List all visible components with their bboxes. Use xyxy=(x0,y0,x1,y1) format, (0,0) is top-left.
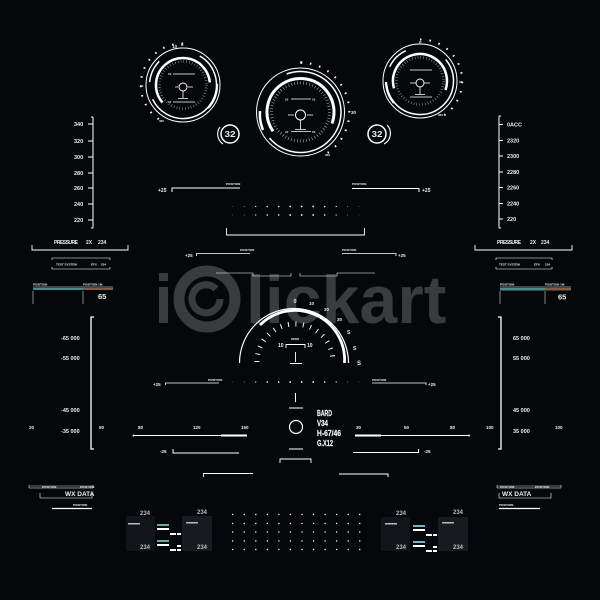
left slider: 120 xyxy=(193,425,201,430)
top position line left xyxy=(158,182,240,194)
left vertical scale: 240 xyxy=(74,202,83,208)
right altitude bracket: 100 xyxy=(555,425,563,430)
teal status bar right: 65 xyxy=(558,292,566,302)
left altitude bracket: -65 000 xyxy=(61,336,80,342)
right altitude bracket xyxy=(486,317,563,449)
WX data right: POSITION xyxy=(535,485,549,489)
left vertical scale xyxy=(74,117,93,228)
data panels left: 234 xyxy=(140,511,151,517)
top position line left: POSITION xyxy=(226,182,240,186)
pressure label right: 234 xyxy=(541,240,550,246)
third position line left: +25 xyxy=(153,382,161,387)
pressure label left: 2X xyxy=(86,240,93,246)
data panels right: 234 xyxy=(453,545,464,551)
small dial: right 32 xyxy=(368,125,390,144)
third position line right: +25 xyxy=(428,382,436,387)
right altitude bracket: 35 000 xyxy=(513,429,530,435)
small dial: right 32: 32 xyxy=(372,130,383,139)
third position line left: POSITION xyxy=(208,378,222,382)
left slider: 80 xyxy=(138,425,144,430)
left vertical scale: 220 xyxy=(74,218,83,224)
wide bracket xyxy=(226,228,364,235)
test system left: EFX xyxy=(91,262,97,266)
gauge: top centre: 10 xyxy=(285,130,289,134)
pressure label left: 234 xyxy=(98,240,107,246)
test system left xyxy=(52,258,110,269)
minus 25 right xyxy=(353,449,431,454)
right vertical scale: 0ACC xyxy=(507,122,522,128)
gauge: top left: 10 xyxy=(172,44,178,49)
WX data right: POSITION xyxy=(500,485,514,489)
WX data left: WX DATA xyxy=(65,491,95,498)
data panels left xyxy=(126,510,212,551)
right slider: 80 xyxy=(450,425,456,430)
teal status bar left: POSITION 1M xyxy=(83,282,103,286)
dot grid top xyxy=(232,206,359,216)
gauge: top right: 30 xyxy=(459,80,463,84)
second position line right: +25 xyxy=(398,253,406,258)
teal status bar right: POSITION 1M xyxy=(545,282,565,286)
third position line right: POSITION xyxy=(372,378,386,382)
right altitude bracket: 55 000 xyxy=(513,356,530,362)
pressure label right: 2X xyxy=(530,240,537,246)
left altitude bracket: 50 xyxy=(99,425,105,430)
WX data right: POSITION xyxy=(499,503,513,507)
gauge: top centre xyxy=(249,60,357,164)
left altitude bracket: -55 000 xyxy=(61,356,80,362)
gauge: top centre: 10 xyxy=(312,98,316,102)
readout text: G.X12 xyxy=(317,438,333,448)
right vertical scale: 2260 xyxy=(507,186,519,192)
right altitude bracket: 100 xyxy=(486,425,494,430)
second position line left: POSITION xyxy=(240,248,254,252)
teal status bar right: POSITION xyxy=(500,282,514,286)
right slider: 30 xyxy=(356,425,362,430)
left vertical scale: 340 xyxy=(74,122,83,128)
gauge: top centre: 0 xyxy=(300,60,303,65)
right altitude bracket: 65 000 xyxy=(513,336,530,342)
WX data left: POSITION xyxy=(42,485,56,489)
teal status bar left: POSITION xyxy=(33,282,47,286)
left vertical scale: 260 xyxy=(74,186,83,192)
right slider: 50 xyxy=(404,425,410,430)
arch gauge: S xyxy=(347,330,351,336)
pressure label right: PRESSURE xyxy=(497,240,522,246)
data panels left: 234 xyxy=(197,510,208,516)
gauge: top right: 0 xyxy=(419,40,422,45)
gauge: top centre: 30 xyxy=(351,110,357,115)
arch gauge: S xyxy=(353,346,357,352)
WX data right xyxy=(497,485,561,508)
gauge: top left: 10 xyxy=(168,100,172,104)
right vertical scale xyxy=(499,116,522,228)
second position line left xyxy=(185,248,254,258)
readout text: BARD xyxy=(317,408,332,418)
left vertical scale: 300 xyxy=(74,155,83,161)
readout text: H-67/46 xyxy=(317,428,341,438)
left altitude bracket: -45 000 xyxy=(61,408,80,414)
arch gauge: 10 xyxy=(307,343,313,349)
right slider xyxy=(355,425,470,436)
gauge: top centre: 10 xyxy=(285,98,289,102)
WX data left: POSITION xyxy=(80,485,94,489)
data panels right: 234 xyxy=(453,510,464,516)
arch gauge: S xyxy=(357,361,361,367)
second position line right xyxy=(342,248,406,258)
arch gauge: 10 xyxy=(278,343,284,349)
gauge: top right xyxy=(373,34,467,128)
left vertical scale: 280 xyxy=(74,171,83,177)
right vertical scale: 2320 xyxy=(507,138,519,144)
third position line left xyxy=(153,378,222,387)
watermark xyxy=(159,262,446,338)
watermark: lickart xyxy=(246,262,446,338)
gauge: top right: 360 xyxy=(438,113,443,117)
left slider xyxy=(132,425,249,436)
test system right: TEST SYSTEM xyxy=(499,262,520,266)
WX data left xyxy=(29,485,95,508)
gauge: top centre: 360 xyxy=(325,153,330,157)
WX data right: WX DATA xyxy=(502,491,532,498)
test system right: EFX xyxy=(534,262,540,266)
right altitude bracket: 45 000 xyxy=(513,408,530,414)
lower bracket right xyxy=(339,474,388,477)
test system right xyxy=(496,258,552,269)
pressure label right xyxy=(475,240,572,250)
small dial: left 32 xyxy=(218,125,239,144)
readout text: V34 xyxy=(317,418,328,428)
WX data left: POSITION xyxy=(73,503,87,507)
pressure label left: PRESSURE xyxy=(54,240,79,246)
second position line left: +25 xyxy=(185,253,193,258)
teal status bar left: 65 xyxy=(98,292,106,301)
second position line right: POSITION xyxy=(342,248,356,252)
left altitude bracket: -35 000 xyxy=(61,429,80,435)
data panels right: 234 xyxy=(396,511,407,517)
right vertical scale: 2280 xyxy=(507,170,519,176)
left vertical scale: 320 xyxy=(74,139,83,145)
lower bracket left xyxy=(204,474,253,477)
pressure label left xyxy=(32,240,128,250)
right vertical scale: 220 xyxy=(507,217,516,223)
data panels right: 234 xyxy=(396,545,407,551)
minus 25 left xyxy=(160,449,239,454)
top position line right xyxy=(352,182,431,194)
teal status bar right xyxy=(500,282,571,304)
dot row middle xyxy=(232,381,359,383)
arch gauge: 30 xyxy=(337,317,343,322)
arch gauge: 10 xyxy=(309,301,315,306)
third position line right xyxy=(372,378,436,387)
arch gauge: 0 xyxy=(294,299,297,305)
readout text xyxy=(317,408,341,448)
test system right: 234 xyxy=(545,262,550,266)
teal status bar left xyxy=(33,282,113,304)
left altitude bracket xyxy=(29,317,105,449)
gauge: top left: 10 xyxy=(168,72,172,76)
arch gauge xyxy=(240,299,361,367)
minus 25 left: -25 xyxy=(160,449,167,454)
arch gauge: 20 xyxy=(324,307,330,312)
data panels left: 234 xyxy=(197,545,208,551)
minus 25 right: -25 xyxy=(424,449,431,454)
top position line right: POSITION xyxy=(352,182,366,186)
gauge: top centre: 10 xyxy=(312,130,316,134)
top position line left: +25 xyxy=(158,188,167,194)
gauge: top left: 30 xyxy=(140,84,144,88)
gauge: top left: 360 xyxy=(159,119,164,123)
top position line right: +25 xyxy=(422,188,431,194)
test system left: TEST SYSTEM xyxy=(56,262,77,266)
crosshair xyxy=(280,393,311,463)
gauge: top left xyxy=(137,39,229,131)
left slider: 150 xyxy=(241,425,249,430)
gauge: top left: 0 xyxy=(181,42,184,47)
small dial: left 32: 32 xyxy=(224,130,236,139)
left altitude bracket: 20 xyxy=(29,425,35,430)
test system left: 234 xyxy=(101,262,106,266)
stepped bracket xyxy=(216,273,375,276)
data panels left: 234 xyxy=(140,545,151,551)
right vertical scale: 2240 xyxy=(507,202,519,208)
dot grid bottom xyxy=(233,514,360,550)
right vertical scale: 2300 xyxy=(507,154,519,160)
data panels right xyxy=(381,510,468,552)
